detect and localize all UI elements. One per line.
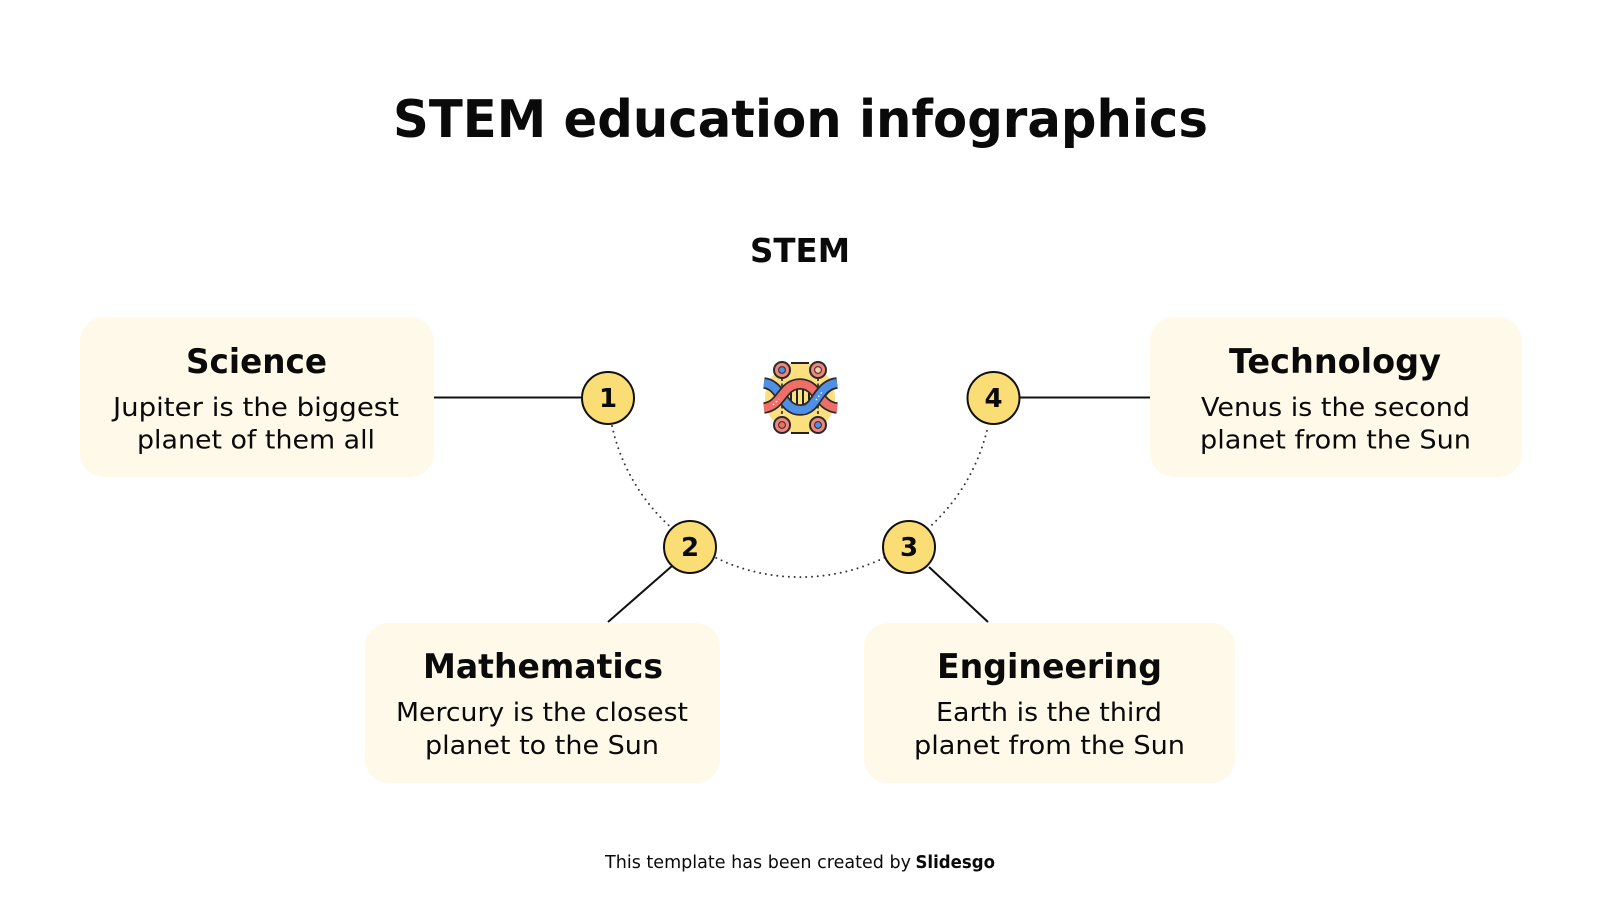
text: Engineering description: Earth is the third (936, 698, 1162, 728)
text: Technology description: Venus is the second (1201, 393, 1470, 423)
marker 3 (883, 521, 935, 573)
subtitle: STEM: STEM (750, 231, 850, 270)
text: Mathematics description: Mercury is the closest (396, 698, 688, 728)
text: Science description (111, 393, 399, 456)
marker 2 (664, 521, 716, 573)
panel: Engineering (864, 623, 1235, 783)
marker 1: 1 (599, 384, 617, 414)
dotted arc connector (612, 426, 988, 577)
marker 4 (968, 372, 1020, 424)
text: Mathematics description (396, 698, 688, 761)
heading: Technology: Technology (1229, 342, 1441, 382)
footer credit: Slidesgo (916, 853, 995, 873)
footer credit: This template has been created by (604, 853, 911, 873)
text: Engineering description (914, 698, 1185, 761)
text: Mathematics description: planet to the Sun (425, 731, 659, 761)
marker 4: 4 (984, 384, 1003, 414)
panel: Technology (1150, 317, 1522, 477)
marker 3: 3 (900, 533, 918, 563)
text: Technology description (1200, 393, 1471, 456)
connector: Science to 1 (433, 396, 582, 398)
marker 1 (582, 372, 634, 424)
marker 2: 2 (681, 533, 699, 563)
icon: DNA helix (764, 362, 837, 434)
text: Technology description: planet from the Sun (1200, 426, 1471, 456)
panel: Mathematics (365, 623, 720, 783)
title: STEM education infographics (393, 90, 1208, 150)
heading: Science: Science (186, 342, 327, 382)
connector: Mathematics to 2 (608, 566, 672, 622)
text: Engineering description: planet from the Sun (914, 731, 1185, 761)
connector: Technology to 4 (1020, 396, 1150, 398)
heading: Mathematics: Mathematics (423, 647, 663, 687)
text: Science description: Jupiter is the biggest (111, 393, 399, 423)
text: Science description: planet of them all (137, 426, 375, 456)
heading: Engineering: Engineering (937, 647, 1162, 687)
panel: Science (80, 317, 434, 477)
connector: Engineering to 3 (929, 567, 988, 622)
